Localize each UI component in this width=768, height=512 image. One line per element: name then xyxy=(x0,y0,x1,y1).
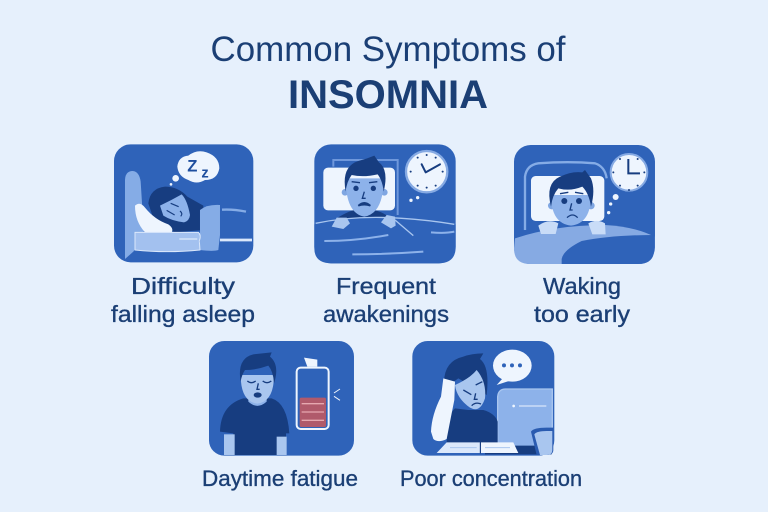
label: waking too early: too early xyxy=(534,301,631,327)
panel: daytime fatigue xyxy=(209,341,354,456)
label: waking too early: Waking xyxy=(543,273,621,299)
panel: difficulty falling asleep xyxy=(114,144,253,262)
icon: awake face xyxy=(337,156,390,218)
icon: blanket xyxy=(200,205,220,251)
icon: clock xyxy=(406,151,447,192)
icon: worried face xyxy=(548,170,595,226)
label: frequent awakenings: awakenings xyxy=(323,301,449,327)
icon: headboard xyxy=(333,160,398,215)
icon: speech bubble xyxy=(493,350,532,385)
title: Common Symptoms of xyxy=(210,30,566,69)
icon: low battery xyxy=(297,358,329,429)
label: difficulty falling asleep xyxy=(111,273,255,327)
panel: waking too early xyxy=(514,145,655,264)
label: difficulty falling asleep: Difficulty xyxy=(131,273,236,299)
icon: monitor xyxy=(485,389,553,455)
panel: difficulty falling asleep: z xyxy=(201,165,209,181)
label: difficulty falling asleep: falling asleep xyxy=(111,301,255,327)
icon: blanket xyxy=(314,217,456,263)
icon: pillow xyxy=(135,204,172,232)
icon: tired person xyxy=(220,352,289,455)
label: poor concentration: Poor concentration xyxy=(400,466,582,491)
icon: pillow xyxy=(531,176,604,221)
icon: sleeping head xyxy=(148,187,203,232)
label: frequent awakenings: Frequent xyxy=(336,273,437,299)
panel: frequent awakenings xyxy=(314,144,456,263)
icon: pillow xyxy=(323,168,395,210)
label: frequent awakenings xyxy=(323,273,449,327)
icon: headboard xyxy=(525,162,607,230)
label: daytime fatigue: Daytime fatigue xyxy=(202,466,358,491)
icon: stressed person xyxy=(431,353,498,447)
panel: poor concentration xyxy=(412,341,554,456)
icon: open book xyxy=(437,442,518,454)
icon: thought bubble xyxy=(170,151,219,186)
title: INSOMNIA xyxy=(288,73,488,117)
title xyxy=(210,30,566,117)
icon: blanket xyxy=(514,225,654,264)
icon: clock xyxy=(611,154,647,191)
icon: warning ticks xyxy=(334,389,340,400)
label: waking too early xyxy=(534,273,631,327)
panel: difficulty falling asleep: Z xyxy=(187,157,197,176)
icon: headboard xyxy=(125,171,144,259)
